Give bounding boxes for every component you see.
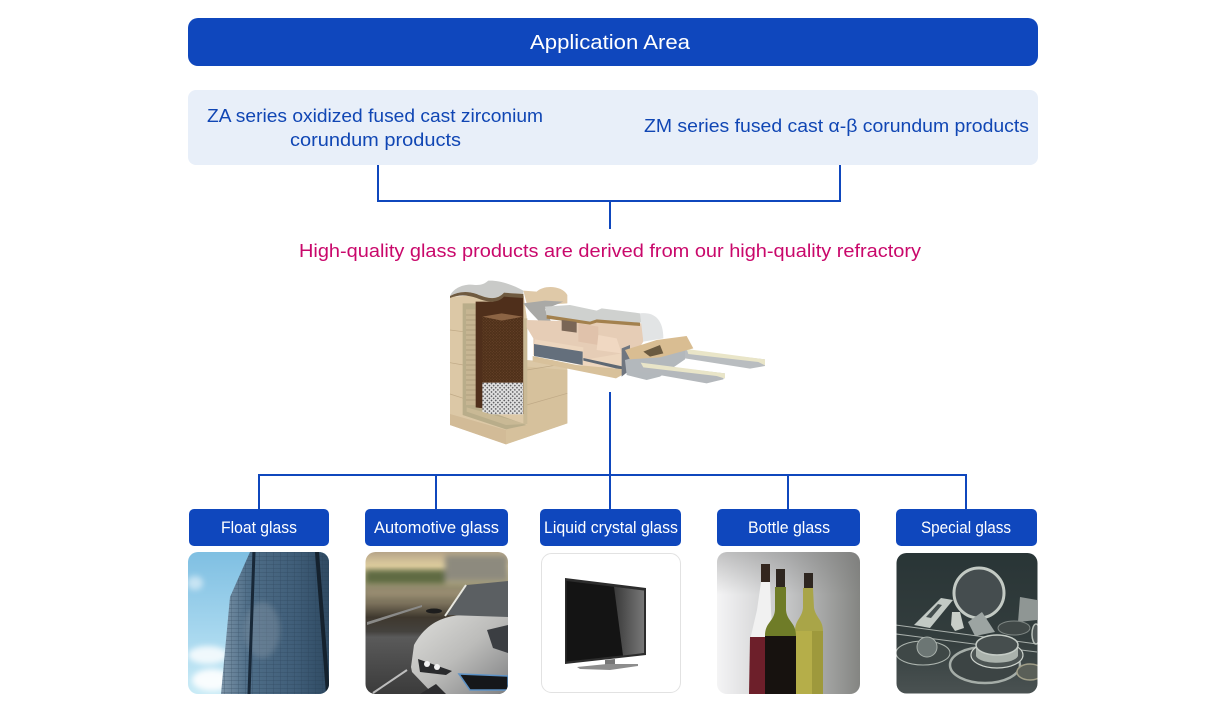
label: Liquid crystal glass: Liquid crystal glass xyxy=(544,519,678,537)
label: Liquid crystal glass xyxy=(540,509,681,546)
category: Float glass xyxy=(187,509,329,694)
panel: product series xyxy=(188,90,1038,165)
photo: three wine bottles xyxy=(717,552,860,694)
label: Bottle glass: Bottle glass xyxy=(748,519,830,537)
connector: series to tagline xyxy=(378,165,840,229)
text: ZA series: corundum products xyxy=(290,129,461,150)
text: ZA series: ZA series oxidized fused cast zirconium xyxy=(207,105,543,126)
photo: flat screen television xyxy=(542,554,680,692)
category: Special glass xyxy=(896,509,1043,694)
label: Automotive glass xyxy=(365,509,508,546)
title banner: Application Area: Application Area xyxy=(530,32,691,54)
tagline: High-quality glass products are derived from our high-quality refractory xyxy=(299,240,922,261)
photo: optical glass pieces xyxy=(896,553,1043,694)
label: Special glass: Special glass xyxy=(921,519,1011,537)
label: Special glass xyxy=(896,509,1037,546)
photo: glass tower against sky xyxy=(187,552,329,694)
label: Float glass: Float glass xyxy=(221,519,297,537)
photo: silver car on road xyxy=(365,552,509,694)
category: Automotive glass xyxy=(365,509,509,694)
text: ZA series xyxy=(207,105,543,150)
connector: furnace to glass types xyxy=(259,392,966,509)
category: Liquid crystal glass xyxy=(540,509,681,692)
label: Automotive glass: Automotive glass xyxy=(374,519,499,537)
label: Bottle glass xyxy=(717,509,860,546)
furnace illustration xyxy=(450,281,765,444)
text: ZM series: ZM series fused cast α-β corundum products xyxy=(644,115,1029,136)
title banner: Application Area xyxy=(188,18,1038,66)
category: Bottle glass xyxy=(717,509,860,694)
furnace interior xyxy=(527,320,643,370)
label: Float glass xyxy=(189,509,329,546)
